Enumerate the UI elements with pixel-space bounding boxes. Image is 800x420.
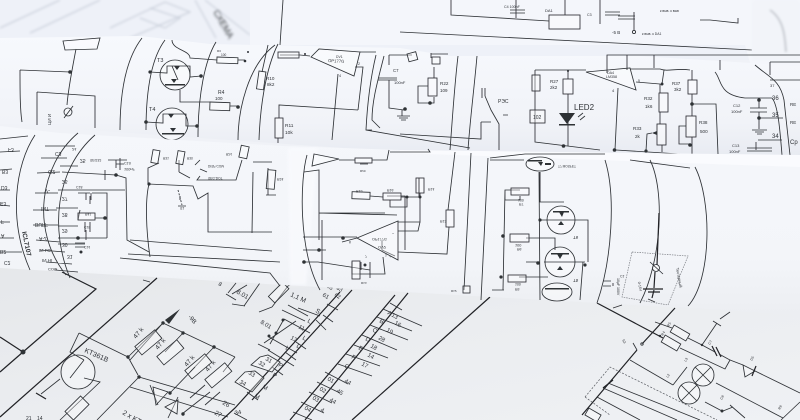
- resistors R3, R4, R10, R11: 10k: [285, 130, 293, 136]
- LED2 with R27: LED2: [574, 103, 595, 112]
- op-amp DA4 LM358: LM358: [606, 75, 617, 79]
- lettered pin strip A to G with numbers: 28: [377, 336, 386, 344]
- switch S1 with R31, R30, R24: S1: [180, 206, 184, 210]
- pin table ICL7107: A-Z: [39, 235, 47, 241]
- outputs 01 to 04: [293, 372, 352, 420]
- pin numbers and capacitors C10, C18, C15, C14: C14: [84, 245, 90, 249]
- resistor R13 and supply rails: R13: [440, 219, 446, 223]
- op-amp DV1: [311, 49, 470, 148]
- switch S1 with R31, R30, R24: [146, 145, 272, 257]
- op-amp DV2 OP177G with feedback: R14: [361, 281, 367, 285]
- outputs 01 to 04: 02: [318, 387, 327, 395]
- pin numbers and capacitors C10, C18, C15, C14: 27: [62, 195, 68, 201]
- lettered pin strip S, L, P, M: S: [314, 308, 322, 316]
- capacitors C12, C13 and pins 34-37: C13: [732, 143, 740, 148]
- lettered pin strip A to G with numbers: 19: [385, 328, 394, 336]
- capacitors C12, C13 and pins 34-37: RE: [790, 102, 796, 107]
- numbered boxes 31-34: 31: [264, 357, 273, 365]
- lettered pin strip A to G with numbers: 14: [366, 353, 375, 361]
- resistor bank 47k: -9В: [186, 314, 197, 325]
- capacitor and 8.01 / 11 / 12 bus: L: [284, 345, 290, 353]
- pin table ICL7107: [0, 133, 95, 278]
- transistor T7: T7 MOSFET: [558, 164, 576, 168]
- op-amp DV1: 2: [358, 62, 360, 66]
- pin table ICL7107: IN LO: [39, 248, 51, 253]
- transistors T6, T5 and resistors R7, R6, R5: R5: [515, 287, 520, 291]
- resistor bank 47k: 47 k: [204, 359, 218, 373]
- lettered pin strip A to G with numbers: 18: [369, 344, 378, 352]
- numbered boxes 31-34: [234, 355, 280, 417]
- op-amp DV2 OP177G with feedback: 1: [385, 253, 387, 257]
- capacitors and block DA1: [504, 5, 738, 36]
- outputs 01 to 04: 44: [343, 379, 352, 387]
- op-amp DV2 OP177G with feedback: −: [392, 231, 395, 236]
- pin numbers and capacitors C10, C18, C15, C14: 25: [80, 157, 86, 163]
- op-amp DV2 OP177G with feedback: +: [389, 254, 392, 259]
- resistor, top left: [63, 38, 100, 50]
- pin table ICL7107: F3: [8, 146, 14, 152]
- LED2 with R27: [550, 70, 595, 148]
- background sheet, out of focus: СХЕМА: [211, 8, 236, 40]
- diodes and lines 26, 27: [97, 367, 235, 420]
- transistors T6, T5 and resistors R7, R6, R5: [499, 172, 588, 301]
- transistor T4: T4: [149, 107, 155, 113]
- LED2 with R27: 2k2: [550, 85, 558, 90]
- pin table ICL7107: ICL7107: [20, 231, 32, 257]
- transistors T6, T5 and resistors R7, R6, R5: R6: [517, 247, 522, 251]
- pin numbers and capacitors C10, C18, C15, C14: SEG32: [90, 158, 101, 162]
- resistors R32, R33: [616, 82, 680, 154]
- box 102: 102: [533, 115, 542, 121]
- resistors R32, R33: 1k6: [645, 104, 653, 109]
- pin table ICL7107: C2: [4, 259, 11, 265]
- lower contacts and dashed box: R8: [777, 405, 783, 410]
- resistor R13 and supply rails: [398, 152, 504, 300]
- transistor T7: [490, 157, 576, 202]
- outputs 01 to 04: 01: [326, 377, 335, 385]
- lettered pin strip S, L, P, M: M: [253, 394, 260, 401]
- op-amp DA4 LM358: DA4: [607, 71, 614, 75]
- resistors R3, R4, R10, R11: R11: [285, 123, 294, 129]
- lettered pin strip A to G with numbers: E: [357, 346, 363, 353]
- lettered pin strip S, L, P, M: P: [271, 373, 277, 380]
- numbered boxes 31-34: 34: [234, 410, 243, 417]
- lettered pin strip S, L, P, M: M: [261, 385, 268, 392]
- lamps: L2: [665, 373, 671, 378]
- switch S1 with R31, R30, R24: SEG-DOT: [208, 176, 223, 180]
- transistors T6, T5 and resistors R7, R6, R5: T5: [573, 278, 579, 283]
- pin table ICL7107: IN HI: [42, 258, 52, 263]
- diode D5: [730, 360, 800, 393]
- transistors T6, T5 and resistors R7, R6, R5: 100: [515, 243, 521, 247]
- pin table ICL7107: D3: [1, 184, 8, 190]
- resistors R15, R16, R14: R14: [428, 187, 434, 191]
- resistor R13 and supply rails: R12: [451, 289, 457, 293]
- lettered pin strip S, L, P, M: [222, 284, 352, 420]
- capacitors and block DA1: DA1: [545, 8, 554, 13]
- upper wiring of the right block: [607, 55, 800, 80]
- diodes and lines 26, 27: 26: [221, 400, 231, 410]
- resistors R37, R38: R38: [699, 120, 708, 125]
- capacitor C7 and trim resistor R22: 109: [440, 88, 448, 93]
- capacitors C12, C13 and pins 34-37: 36: [772, 96, 779, 102]
- switch S1 with R31, R30, R24: R24: [226, 152, 232, 156]
- pin numbers and capacitors C10, C18, C15, C14: 100nF: [124, 167, 135, 171]
- pin table ICL7107: F: [1, 218, 4, 224]
- pin numbers and capacitors C10, C18, C15, C14: C15: [84, 225, 90, 229]
- capacitor 8.01 and resistor 1,1 M: 8.01: [235, 289, 250, 301]
- capacitors C12, C13 and pins 34-37: 35: [772, 113, 779, 119]
- op-amp DV2 OP177G with feedback: OV2: [378, 245, 387, 250]
- switch S1 with R31, R30, R24: R30: [187, 156, 193, 160]
- transistors T6, T5 and resistors R7, R6, R5: T6: [573, 235, 579, 240]
- transistors T6, T5 and resistors R7, R6, R5: 100: [515, 282, 521, 286]
- switch and resistors R4, R5, capacitor C7: [582, 303, 755, 415]
- capacitors C12, C13 and pins 34-37: 100nF: [729, 149, 741, 154]
- resistors R15, R16, R14: R16: [387, 188, 393, 192]
- pin numbers and capacitors C10, C18, C15, C14: 29: [62, 227, 68, 233]
- switch S1 with R31, R30, R24: R31: [163, 156, 169, 160]
- lower table wires: [120, 162, 280, 286]
- lettered pin strip A to G with numbers: A: [386, 311, 392, 318]
- transistor KT361B: [20, 333, 128, 420]
- capacitors C12, C13 and pins 34-37: RE: [790, 120, 796, 125]
- resistor bank 47k: 47 k: [132, 326, 146, 340]
- lettered pin strip A to G with numbers: G: [343, 364, 350, 371]
- resistors R3, R4, R10, R11: R10: [266, 76, 275, 81]
- op-amp DV1: 4: [339, 74, 341, 78]
- lettered pin strip S, L, P, M: L: [301, 336, 307, 343]
- resistors R32, R33: R33: [633, 126, 642, 131]
- top rolled sheet: [250, 0, 800, 70]
- capacitors and block DA1: к выв. к выв: [660, 9, 679, 13]
- LED2 with R27: R27: [550, 79, 559, 84]
- pin table ICL7107: B2: [0, 248, 6, 254]
- lamps: L3: [683, 357, 689, 362]
- resistor bank 47k: [126, 309, 235, 405]
- op-amp DV1 with R20: [312, 149, 430, 173]
- capacitors C12, C13 and pins 34-37: C12: [733, 103, 741, 108]
- capacitors C12, C13 and pins 34-37: 34: [772, 134, 779, 140]
- wires toward right edge of sheet three: [490, 154, 690, 168]
- lettered pin strip A to G with numbers: F: [350, 355, 356, 362]
- pin table ICL7107: E3: [0, 200, 6, 206]
- op-amp DV2 OP177G with feedback: 6: [349, 240, 351, 244]
- op-amp DV1 with R20: R20: [360, 169, 366, 173]
- transistors T6, T5 and resistors R7, R6, R5: 100: [518, 198, 524, 202]
- lettered pin strip A to G with numbers: 17: [360, 362, 369, 370]
- pin numbers and capacitors C10, C18, C15, C14: C10: [124, 161, 131, 165]
- capacitors C12, C13 and pins 34-37: [715, 65, 798, 155]
- op-amp DA4 LM358: [570, 68, 690, 152]
- capacitors C12, C13 and pins 34-37: 37: [770, 83, 775, 88]
- numbered boxes 31-34: 32: [257, 361, 266, 369]
- capacitors and block DA1: C4 100nF: [504, 5, 521, 9]
- outputs 01 to 04: 04: [303, 406, 312, 414]
- resistor bank 47k: 47 k: [154, 337, 168, 351]
- switch and resistors R4, R5, capacitor C7: R4: [660, 331, 666, 336]
- wire traces, left: [20, 38, 278, 140]
- capacitors and block DA1: C3: [587, 13, 592, 17]
- lettered pin strip A to G with numbers: D: [364, 337, 371, 344]
- pin table ICL7107: INT: [41, 205, 49, 211]
- numbered boxes 31-34: 33: [247, 371, 256, 379]
- resistors R3, R4, R10, R11: 100: [221, 53, 227, 57]
- capacitor C7 and trim resistor R22: C7: [393, 68, 399, 73]
- pin table ICL7107: V-: [44, 187, 50, 194]
- lettered pin strip A to G with numbers: 13: [390, 313, 399, 321]
- pin numbers and capacitors C10, C18, C15, C14: 24: [72, 147, 77, 152]
- capacitor C7 and trim resistor R22: 100nF: [394, 80, 406, 85]
- resistors R3, R4, R10, R11: 8k2: [267, 82, 275, 87]
- transistor T4: [144, 107, 199, 140]
- capacitor and 8.01 / 11 / 12 bus: 8.01: [259, 320, 273, 331]
- lettered pin strip S, L, P, M: P: [277, 363, 283, 370]
- lettered pin strip S, L, P, M: 62: [333, 293, 341, 301]
- pin numbers and capacitors C10, C18, C15, C14: R41: [85, 212, 91, 216]
- pin table ICL7107: G2: [48, 168, 55, 174]
- capacitor C1 and tester block: Тестерный: [675, 267, 683, 288]
- resistors R37, R38: R37: [672, 81, 681, 86]
- lettered pin strip A to G with numbers: [290, 293, 422, 420]
- transistors T6, T5 and resistors R7, R6, R5: R7: [519, 202, 524, 206]
- capacitors C12, C13 and pins 34-37: 100nF: [731, 109, 743, 114]
- pin table ICL7107: BUFF: [35, 221, 48, 227]
- bottom flat sheet: [0, 255, 800, 420]
- meter symbol: [64, 70, 73, 118]
- lettered pin strip S, L, P, M: 38: [325, 284, 334, 292]
- switch and resistors R4, R5, capacitor C7: D5: [749, 356, 755, 362]
- capacitor C1 and tester block: C1: [620, 274, 625, 278]
- resistors R3, R4, R10, R11: R3: [217, 49, 221, 53]
- lettered pin strip S, L, P, M: L: [295, 344, 301, 351]
- lettered pin strip A to G with numbers: B: [378, 319, 384, 326]
- capacitor and 8.01 / 11 / 12 bus: 12: [289, 335, 298, 344]
- lower contacts and dashed box: [585, 367, 800, 420]
- op-amp DV1: DV1: [336, 55, 343, 59]
- capacitors and block DA1: -5 В: [612, 30, 620, 35]
- resistors R37, R38: 500: [700, 129, 708, 134]
- transistor T3: [148, 58, 210, 102]
- pin table ICL7107: B3: [2, 168, 8, 174]
- capacitor C1 and tester block: 0-15V: [637, 281, 643, 292]
- resistors R15, R16, R14: [352, 178, 434, 222]
- lamps: C8: [719, 395, 725, 400]
- capacitor C7 and trim resistor R22: [378, 52, 449, 120]
- long diagonal wires: [0, 272, 490, 420]
- resistors R3, R4, R10, R11: 100: [215, 96, 223, 101]
- outputs 01 to 04: 45: [335, 389, 344, 397]
- pin table ICL7107: COM: [48, 267, 57, 272]
- resistors R32, R33: R32: [644, 96, 653, 101]
- capacitor 8.01 and resistor 1,1 M: 8: [217, 282, 223, 288]
- capacitor C7 and trim resistor R22: R22: [440, 81, 449, 86]
- lettered pin strip S, L, P, M: 63: [335, 286, 343, 294]
- switch S1 with R31, R30, R24: DISP-COM: [208, 164, 224, 168]
- capacitor and 8.01 / 11 / 12 bus: [258, 305, 320, 366]
- pin numbers and capacitors C10, C18, C15, C14: 26: [62, 178, 68, 184]
- capacitor 8.01 and resistor 1,1 M: [217, 280, 307, 312]
- switch and resistors R4, R5, capacitor C7: S3: [621, 338, 627, 344]
- relay contact РЭС: РЭС: [498, 99, 509, 105]
- op-amp DV2 OP177G with feedback: [302, 155, 405, 290]
- pin table ICL7107: A: [1, 232, 5, 238]
- switch and resistors R4, R5, capacitor C7: R5: [666, 322, 672, 328]
- lettered pin strip A to G with numbers: 16: [393, 321, 402, 329]
- diodes and lines 26, 27: 27: [213, 410, 223, 420]
- op-amp DA4 LM358: 4: [612, 88, 615, 93]
- lettered pin strip S, L, P, M: L: [306, 319, 312, 326]
- pin numbers and capacitors C10, C18, C15, C14: 28: [62, 211, 68, 217]
- op-amp DV2 OP177G with feedback: 7: [365, 254, 367, 258]
- numbered boxes 31-34: 34: [238, 380, 247, 388]
- resistors R15, R16, R14: R15: [356, 189, 362, 193]
- capacitor 8.01 and resistor 1,1 M: 1,1 М: [289, 291, 307, 305]
- outputs 01 to 04: 03: [311, 396, 320, 404]
- capacitor C1 and tester block: [597, 160, 707, 306]
- lettered pin strip A to G with numbers: C: [371, 328, 378, 335]
- capacitor C1 and tester block: 10µF 100V: [616, 278, 620, 296]
- resistors R37, R38: [672, 70, 718, 154]
- relay contact РЭС: [400, 56, 509, 150]
- third rolled sheet: [0, 126, 800, 315]
- pin numbers and capacitors C10, C18, C15, C14: 31: [67, 253, 73, 259]
- label ЦИ И: ЦИ И: [47, 114, 52, 125]
- lamps: [665, 357, 783, 418]
- resistor bank 47k: 47 k: [183, 354, 197, 368]
- box 102: [530, 70, 600, 150]
- op-amp DV2 OP177G with feedback: OP177G: [372, 237, 387, 241]
- capacitors and block DA1: к выв. к DA1: [642, 32, 661, 36]
- pin table ICL7107: C3: [55, 150, 62, 156]
- resistors R32, R33: 2k: [635, 134, 641, 139]
- resistors R3, R4, R10, R11: [172, 40, 358, 143]
- second rolled sheet: [0, 36, 800, 160]
- resistors R37, R38: 3k2: [674, 87, 682, 92]
- lettered pin strip S, L, P, M: 61: [321, 293, 330, 301]
- capacitor and 8.01 / 11 / 12 bus: 11: [297, 324, 306, 333]
- resistors R3, R4, R10, R11: R4: [218, 90, 225, 96]
- transistor KT361B: KT361B: [83, 347, 109, 364]
- switch and resistors R4, R5, capacitor C7: C7: [707, 340, 713, 346]
- right-hand rolled edge: [752, 0, 800, 60]
- pin numbers and capacitors C10, C18, C15, C14: [56, 147, 149, 259]
- resistor R24: [266, 170, 283, 189]
- pin numbers and capacitors C10, C18, C15, C14: C18: [76, 185, 82, 189]
- resistor R24: R24: [277, 177, 283, 181]
- transistor T3: T3: [157, 58, 163, 64]
- lower left resistor fragment: [26, 396, 89, 420]
- pin numbers and capacitors C10, C18, C15, C14: 30: [62, 241, 68, 247]
- background sheet, out of focus: [0, 0, 800, 60]
- op-amp DA4 LM358: 5: [638, 79, 640, 83]
- outputs 01 to 04: 44: [328, 398, 337, 406]
- capacitors C12, C13 and pins 34-37: Cp: [790, 140, 798, 146]
- op-amp DV1: OP177G: [328, 58, 344, 64]
- outputs 01 to 04: 4: [319, 408, 325, 415]
